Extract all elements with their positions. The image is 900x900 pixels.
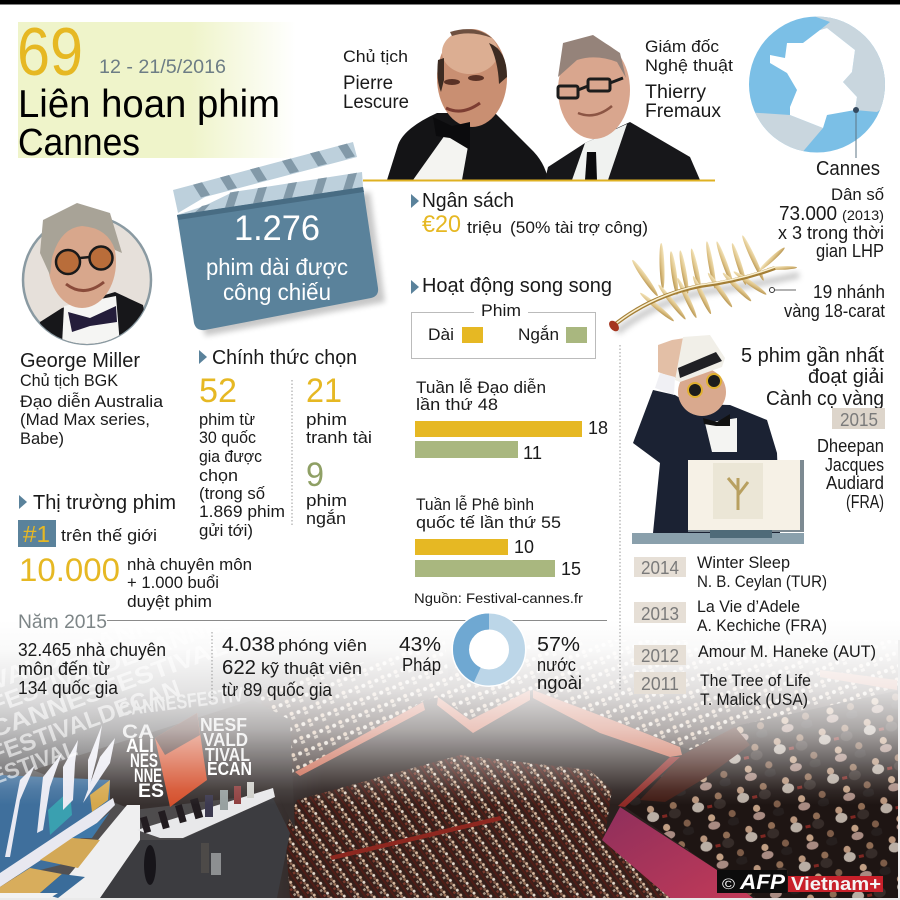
palm caption: vàng 18-carat xyxy=(784,301,885,321)
portrait: Pierre Lescure xyxy=(387,29,548,180)
label: Pierre Lescure: Pierre xyxy=(343,73,393,94)
winner 2014: 2014 xyxy=(641,558,679,578)
donut labels xyxy=(399,634,582,693)
gold divider under portraits xyxy=(363,180,715,182)
top black bar xyxy=(0,0,900,4)
photo stage columns lettering: NESF xyxy=(200,715,247,735)
bar chart: Critics' Week xyxy=(415,495,581,579)
label: Thierry Fremaux: Thierry xyxy=(645,82,707,103)
Cannes population text xyxy=(778,158,885,261)
section: parallel activities xyxy=(411,275,612,606)
text: George Miller: Đạo diễn Australia xyxy=(20,392,164,411)
Cannes population text: gian LHP xyxy=(816,241,884,261)
bar chart: Directors' Fortnight xyxy=(415,378,608,463)
section: budget: €20 xyxy=(422,211,461,238)
section: year 2015: 134 quốc gia xyxy=(18,678,119,698)
bar chart: Critics' Week: Tuần lễ Phê bình xyxy=(416,495,534,514)
winner 2013: La Vie d’Adele xyxy=(697,597,800,616)
winner 2015: Dheepan xyxy=(817,436,884,456)
section: film market: nhà chuyên môn xyxy=(127,555,252,574)
photo stage columns lettering xyxy=(122,715,252,802)
winner 2012: 2012 xyxy=(641,646,679,666)
winner 2015: Jacques xyxy=(825,455,884,475)
text: George Miller xyxy=(20,350,164,448)
section: official selection: gia được xyxy=(199,447,262,466)
photo stage columns lettering: VALD xyxy=(203,730,248,750)
section: year 2015: Năm 2015 xyxy=(18,612,107,633)
winner 2014: N. B. Ceylan (TUR) xyxy=(697,572,827,591)
logo: AFP Vietnam+ xyxy=(717,870,883,894)
section: official selection: (trong số xyxy=(199,484,266,503)
bar chart: Critics' Week: quốc tế lần thứ 55 xyxy=(416,513,561,532)
winner 2011: 2011 xyxy=(641,674,679,694)
label: Thierry Fremaux: Fremaux xyxy=(645,101,721,122)
legend: film types: Ngắn xyxy=(518,325,559,344)
section: year 2015: từ 89 quốc gia xyxy=(222,680,333,700)
bar chart: Directors' Fortnight: 11 xyxy=(523,443,542,463)
donut labels: Pháp xyxy=(402,655,441,675)
winner 2011: The Tree of Life xyxy=(700,671,811,690)
donut labels: nước xyxy=(537,655,576,675)
section: official selection: 1.869 phim xyxy=(199,502,285,521)
heading: last 5 winners: đoạt giải xyxy=(808,366,884,388)
photo: Jacques Audiard with trophy xyxy=(632,335,804,544)
donut labels: 57% xyxy=(537,634,580,656)
winner 2012: Amour M. Haneke (AUT) xyxy=(698,642,876,661)
section: official selection: gửi tới) xyxy=(199,521,253,540)
photo stage columns lettering: NES xyxy=(130,751,158,772)
label: Thierry Fremaux: Nghệ thuật xyxy=(645,56,733,75)
map: France with Cannes xyxy=(749,16,885,158)
heading: last 5 winners xyxy=(741,345,884,410)
portrait: George Miller xyxy=(23,203,151,345)
title block: 69 xyxy=(17,14,83,90)
photo wall lettering xyxy=(0,598,245,790)
bar chart: Directors' Fortnight: Tuần lễ Đạo diễn xyxy=(416,378,546,397)
bar chart: Directors' Fortnight: lần thứ 48 xyxy=(416,395,498,414)
palm caption: 19 nhánh xyxy=(813,282,885,302)
photo stage columns lettering: CA xyxy=(122,722,154,743)
section: official selection: phim từ xyxy=(199,410,255,429)
section: official selection: tranh tài xyxy=(306,428,372,447)
winner 2013: A. Kechiche (FRA) xyxy=(697,616,827,635)
winner 2013 xyxy=(634,597,827,635)
text: George Miller: (Mad Max series, xyxy=(20,410,150,429)
title block xyxy=(17,14,296,164)
clapperboard: 1.276 films: phim dài được xyxy=(206,254,348,280)
section: official selection: 30 quốc xyxy=(199,428,256,447)
section: budget: Ngân sách xyxy=(422,190,514,212)
portrait: Thierry Fremaux xyxy=(545,35,700,180)
donut chart: 43% France, 57% foreign xyxy=(452,612,526,687)
text: George Miller: Chủ tịch BGK xyxy=(20,371,119,390)
winner 2014 xyxy=(634,553,827,591)
label: Pierre Lescure: Chủ tịch xyxy=(343,47,408,66)
section: film market: #1 xyxy=(23,521,50,547)
text: George Miller: Babe) xyxy=(20,429,64,448)
Cannes population text: (2013) xyxy=(842,207,884,223)
section: official selection: Chính thức chọn xyxy=(212,347,357,369)
section: parallel activities: Hoạt động song song xyxy=(422,275,612,297)
source note: Nguồn: Festival-cannes.fr xyxy=(414,590,583,606)
photo stage columns lettering: NNE xyxy=(134,766,162,787)
label: Pierre Lescure xyxy=(343,47,409,113)
bar chart: Critics' Week: 10 xyxy=(514,537,534,557)
section: year 2015: phóng viên xyxy=(278,636,367,655)
section: official selection: phim xyxy=(306,410,347,429)
bar chart: Critics' Week: 15 xyxy=(561,559,581,579)
title block: Liên hoan phim xyxy=(18,83,280,126)
section: official selection: 21 xyxy=(306,372,342,410)
bar chart: Directors' Fortnight: 18 xyxy=(588,418,608,438)
winner 2015 xyxy=(817,408,885,512)
photo stage columns lettering: TIVAL xyxy=(205,745,250,765)
section: year 2015: kỹ thuật viên xyxy=(261,659,362,678)
title block: Cannes xyxy=(18,122,140,164)
label: Thierry Fremaux xyxy=(645,37,733,122)
section: official selection xyxy=(199,347,372,540)
winner 2011: T. Malick (USA) xyxy=(700,690,808,709)
label: Pierre Lescure: Lescure xyxy=(343,92,409,113)
donut labels: ngoài xyxy=(537,673,582,693)
Cannes population text: Dân số xyxy=(831,185,885,204)
photo wall lettering: CANNESFESTIV xyxy=(118,684,245,721)
section: film market xyxy=(18,492,252,611)
winner 2011 xyxy=(634,671,811,709)
section: film market: 10.000 xyxy=(19,552,120,588)
clapperboard: 1.276 films: 1.276 xyxy=(234,209,320,248)
clapperboard: 1.276 films xyxy=(173,142,385,336)
section: official selection: chọn xyxy=(199,466,238,485)
section: budget xyxy=(411,190,648,238)
heading: last 5 winners: 5 phim gần nhất xyxy=(741,345,884,367)
text: George Miller: George Miller xyxy=(20,350,140,372)
legend: film types: Dài xyxy=(428,325,454,344)
section: year 2015: môn đến từ xyxy=(18,659,110,679)
winner 2013: 2013 xyxy=(641,604,679,624)
Cannes population text: 73.000 xyxy=(779,203,837,225)
section: year 2015: 32.465 nhà chuyên xyxy=(18,640,166,660)
winner 2012 xyxy=(634,642,876,666)
legend: film types: Phim xyxy=(481,301,521,320)
icon: golden palm xyxy=(607,234,799,333)
winner 2015: 2015 xyxy=(840,410,878,430)
clapperboard: 1.276 films: công chiếu xyxy=(223,279,331,305)
photo stage columns lettering: ALI xyxy=(126,736,154,757)
Cannes population text: x 3 trong thời xyxy=(778,223,884,243)
section: official selection: 52 xyxy=(199,372,237,410)
section: film market: duyệt phim xyxy=(127,592,212,611)
section: official selection: 9 xyxy=(306,456,324,494)
section: year 2015: 4.038 xyxy=(222,634,275,656)
logo: AFP Vietnam+: AFP xyxy=(739,871,786,894)
photo stage columns lettering: ES xyxy=(138,781,164,802)
label: Thierry Fremaux: Giám đốc xyxy=(645,37,720,56)
winner 2015: (FRA) xyxy=(846,492,884,512)
dotted column divider xyxy=(619,345,621,690)
section: year 2015 xyxy=(18,612,607,700)
section: film market: + 1.000 buổi xyxy=(127,573,219,592)
Cannes population text: Cannes xyxy=(816,158,880,180)
section: film market: Thị trường phim xyxy=(33,492,176,514)
section: official selection: phim xyxy=(306,491,347,510)
winner 2015: Audiard xyxy=(826,473,884,493)
palm caption xyxy=(784,282,885,321)
section: budget: triệu xyxy=(467,218,502,237)
heading: last 5 winners: Cành cọ vàng xyxy=(766,388,884,410)
photo: Cannes festival auditorium xyxy=(0,620,900,900)
winner 2014: Winter Sleep xyxy=(697,553,790,572)
photo stage columns lettering: ECAN xyxy=(207,759,252,779)
section: film market: trên thế giới xyxy=(61,526,157,545)
section: year 2015: 622 xyxy=(222,657,256,679)
title block: 12 - 21/5/2016 xyxy=(99,57,226,78)
logo: AFP Vietnam+: Vietnam+ xyxy=(791,874,881,894)
section: budget: (50% tài trợ công) xyxy=(510,218,648,237)
section: official selection: ngắn xyxy=(306,509,346,528)
legend: film types xyxy=(412,301,596,358)
logo: AFP Vietnam+: © xyxy=(722,876,735,893)
donut labels: 43% xyxy=(399,634,441,656)
